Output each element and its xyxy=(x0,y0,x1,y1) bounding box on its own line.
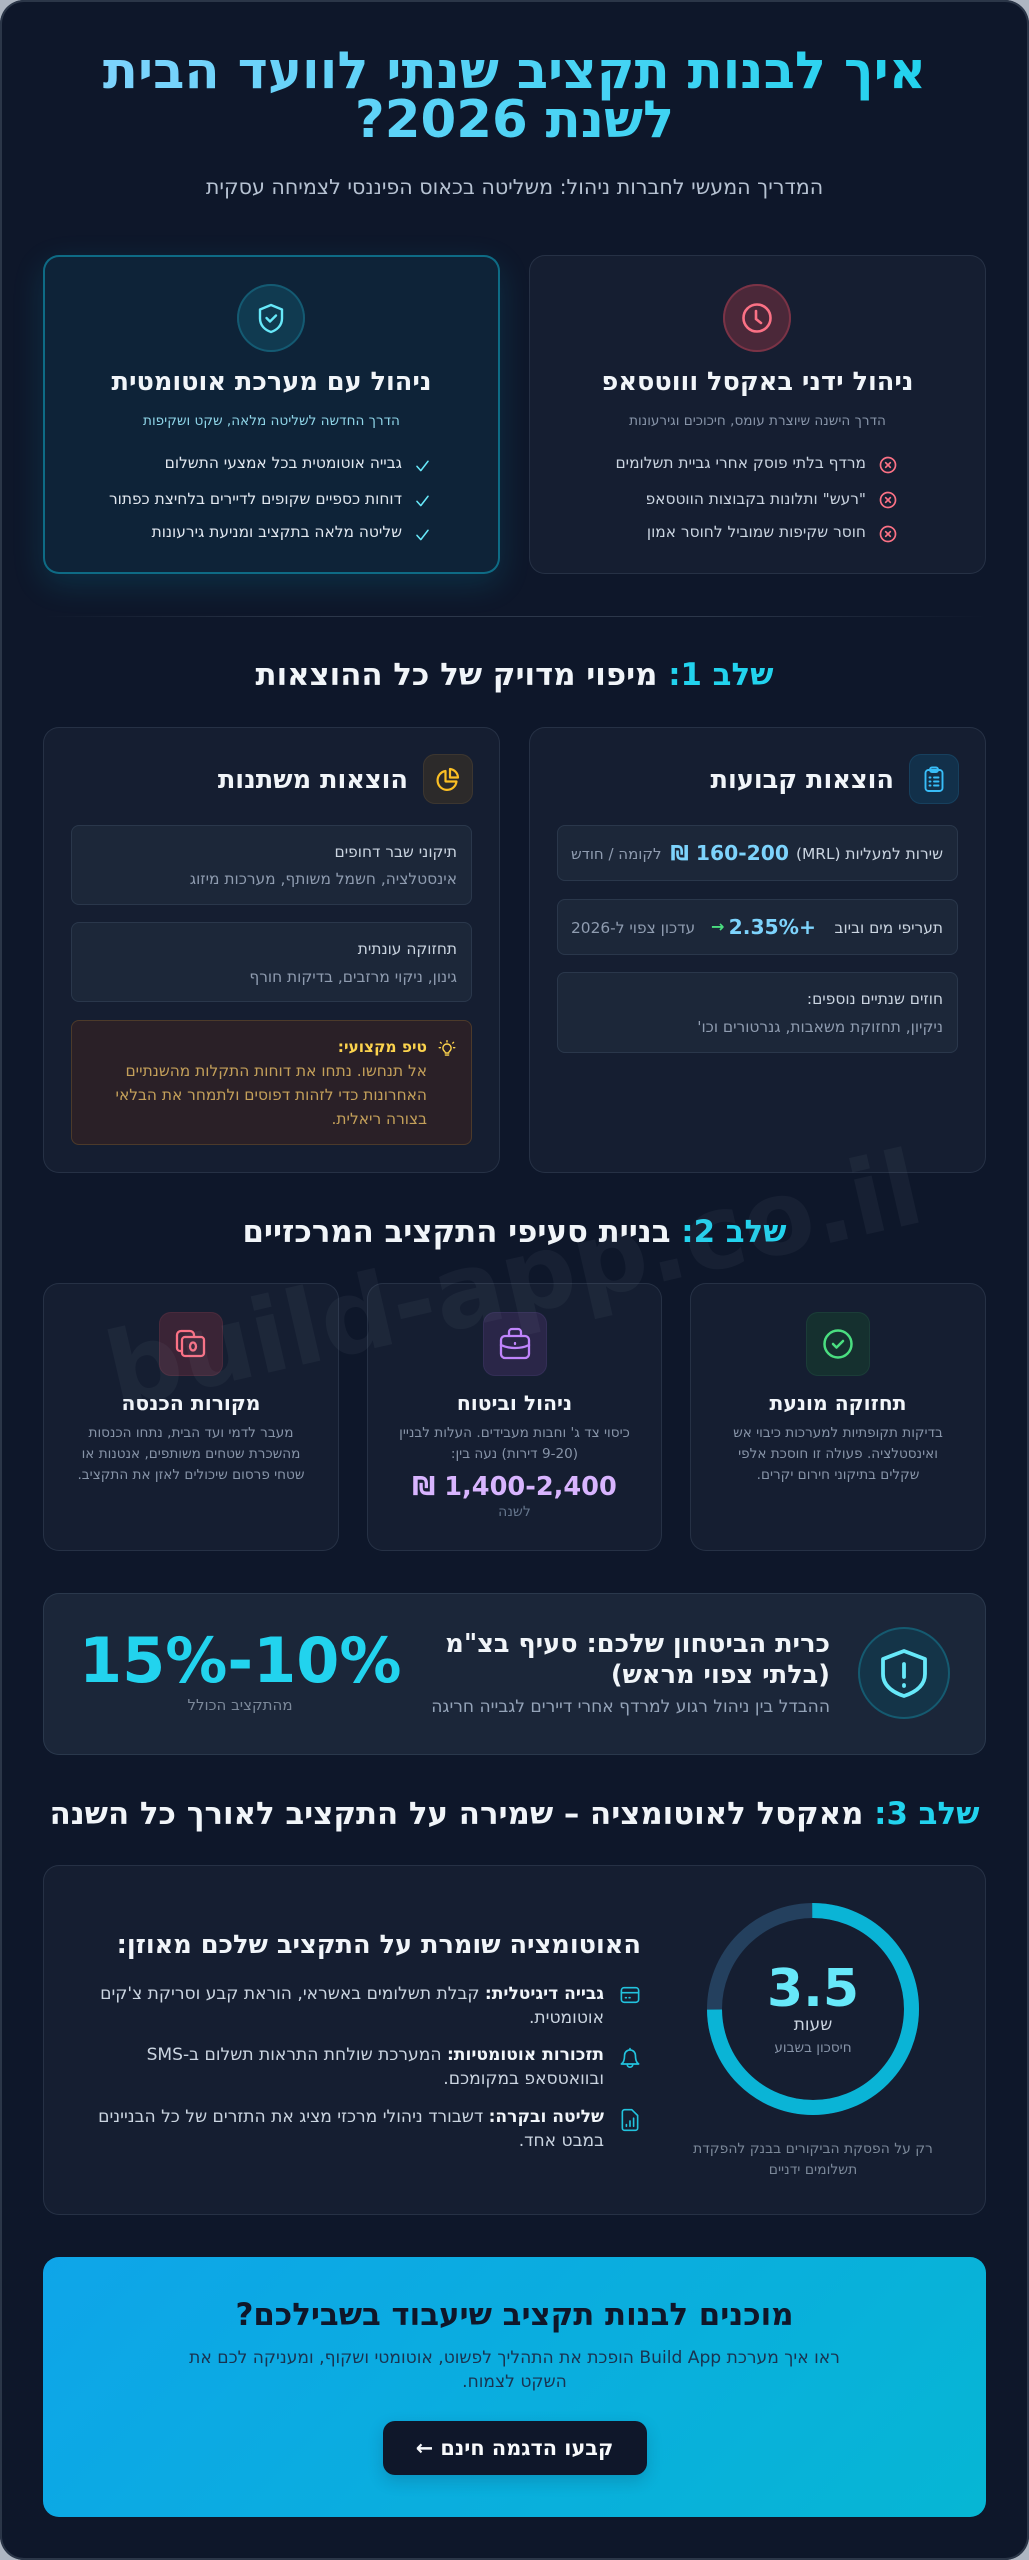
row: water and sewage: תעריפי מים וביוב xyxy=(835,919,943,937)
row: water and sewage xyxy=(557,899,958,955)
icon: clipboard xyxy=(909,754,959,804)
button xyxy=(382,2421,646,2475)
sub label: חיסכון בשבוע xyxy=(774,2040,852,2056)
panel: management and insurance xyxy=(367,1283,662,1551)
row: elevator service xyxy=(557,825,958,881)
row: seasonal maintenance: גינון, ניקוי מרזבים, בדיקות חורף xyxy=(249,968,457,986)
item: lack of transparency: חוסר שקיפות שמוביל לחוסר אמון xyxy=(647,523,866,541)
description: כיסוי צד ג' וחבות מעבידים. העלות לבניין xyxy=(399,1425,630,1441)
row: elevator service: שירות למעליות (MRL) xyxy=(796,845,943,863)
text: גבייה דיגיטלית: קבלת תשלומים באשראי, הוראת קבע וסריקת צ'קים xyxy=(100,1984,604,2004)
heading: step 3: שלב 3: מאקסל לאוטומציה – שמירה על התקציב לאורך כל השנה xyxy=(50,1796,979,1832)
text: במבט אחד. xyxy=(519,2131,604,2151)
text: בצורה ריאלית. xyxy=(332,1110,427,1128)
description: מהשכרת שטחים משותפים, אנטנות או xyxy=(82,1446,300,1462)
description xyxy=(77,1425,305,1483)
row: annual contracts: חוזים שנתיים נוספים: xyxy=(807,990,943,1008)
text: אל תנחשו. נתחו את דוחות התקלות מהשנתיים xyxy=(125,1062,427,1080)
icon: banknotes xyxy=(159,1312,223,1376)
icon: briefcase xyxy=(483,1312,547,1376)
description xyxy=(189,2348,840,2392)
text: האחרונות כדי לזהות דפוסים ולתמחר את הבלאי xyxy=(116,1086,427,1104)
description: (9-20 דירות) נעה בין: xyxy=(451,1446,578,1462)
title: ניהול וביטוח xyxy=(457,1391,572,1415)
heading: step 1: שלב 1: מיפוי מדויק של כל ההוצאות xyxy=(256,657,773,693)
row: emergency repairs: תיקוני שבר דחופים xyxy=(335,843,457,861)
row: elevator service: לקומה / חודש xyxy=(571,845,662,863)
row: seasonal maintenance: תחזוקה עונתית xyxy=(358,940,457,958)
unit: לשנה xyxy=(498,1504,531,1520)
value: 3.5 xyxy=(767,1959,859,2019)
chart caption: רק על הפסקת הביקורים בבנק להפקדת xyxy=(693,2141,933,2157)
description: בדיקות תקופתיות למערכות כיבוי אש xyxy=(733,1425,943,1441)
text: שליטה ובקרה: דשבורד ניהולי מרכזי מציג את התזרים של כל הבניינים xyxy=(98,2107,604,2127)
title: איך לבנות תקציב שנתי לוועד הבית xyxy=(103,41,926,101)
panel: fixed expenses xyxy=(529,727,986,1173)
icon: shield alert xyxy=(858,1627,950,1719)
heading: האוטומציה שומרת על התקציב שלכם מאוזן: xyxy=(117,1930,641,1960)
description: ההבדל בין ניהול רגוע למרדף אחרי דיירים לגבייה חריגה xyxy=(431,1697,830,1717)
title: לשנת 2026? xyxy=(355,90,674,150)
unit: שעות xyxy=(794,2015,832,2035)
description: ראו איך מערכת Build App הופכת את התהליך לפשוט, אוטומטי ושקוף, ומעניקה לכם את xyxy=(189,2348,840,2368)
panel: variable expenses xyxy=(43,727,500,1173)
value: 1,400-2,400 ₪ xyxy=(412,1472,617,1502)
panel: income sources xyxy=(43,1283,339,1551)
heading: מוכנים לבנות תקציב שיעבוד בשבילכם? xyxy=(235,2297,794,2333)
description: השקט לצמוח. xyxy=(462,2372,567,2392)
row: seasonal maintenance xyxy=(71,922,472,1002)
panel: manual management xyxy=(529,255,986,574)
heading: (בלתי צפוי מראש) xyxy=(611,1660,830,1690)
icon: pie chart xyxy=(423,754,473,804)
icon: shield check xyxy=(237,284,305,352)
panel: call to action xyxy=(43,2257,986,2517)
list: benefits xyxy=(109,454,429,541)
watermark: build-app.co.il xyxy=(95,1128,933,1432)
chart caption xyxy=(693,2141,933,2178)
callout: pro tip xyxy=(71,1020,472,1145)
description: מעבר לדמי ועד הבית, נתחו הכנסות xyxy=(89,1425,293,1441)
heading: כרית הביטחון שלכם: סעיף בצ"מ xyxy=(445,1629,830,1659)
text xyxy=(100,1984,604,2028)
title: תחזוקה מונעת xyxy=(770,1391,906,1415)
item: automatic reminders xyxy=(147,2045,640,2089)
item: full control: שליטה מלאה בתקציב ומניעת גירעונות xyxy=(152,523,402,541)
chart caption: תשלומים ידניים xyxy=(769,2162,857,2178)
stat label: מהתקציב הכולל xyxy=(187,1696,293,1714)
row: emergency repairs xyxy=(71,825,472,905)
row: annual contracts: ניקיון, תחזוקת משאבות, גנרטורים וכו' xyxy=(697,1018,943,1036)
description: שקלים בתיקוני חירום יקרים. xyxy=(757,1467,919,1483)
text: אוטומטית. xyxy=(529,2008,604,2028)
panel: automatic management xyxy=(43,255,500,574)
description: הדרך הישנה שיוצרת עומס, חיכוכים וגירעונות xyxy=(629,413,886,429)
heading: הוצאות קבועות xyxy=(711,765,894,795)
subtitle: המדריך המעשי לחברות ניהול: משליטה בכאוס הפיננסי לצמיחה עסקית xyxy=(206,175,823,199)
heading: ניהול עם מערכת אוטומטית xyxy=(111,367,432,397)
text: ובוואטסאפ במקומכם. xyxy=(443,2069,604,2089)
row: water and sewage: עדכון צפוי ל-2026 xyxy=(571,919,695,937)
stat: 15%-10% xyxy=(79,1624,402,1697)
button: קבעו הדגמה חינם ← xyxy=(416,2436,613,2460)
description xyxy=(733,1425,943,1483)
row: elevator service: 160-200 ₪ xyxy=(670,841,789,865)
heading: step 2: שלב 2: בניית סעיפי התקציב המרכזיים xyxy=(242,1214,787,1250)
icon: check circle xyxy=(806,1312,870,1376)
description: הדרך החדשה לשליטה מלאה, שקט ושקיפות xyxy=(143,413,400,429)
text: תזכורות אוטומטיות: המערכת שולחת התראות תשלום ב-SMS xyxy=(147,2045,604,2065)
text xyxy=(116,1038,427,1128)
icon: report xyxy=(622,2108,638,2132)
text xyxy=(98,2107,604,2151)
heading: ניהול ידני באקסל וווטסאפ xyxy=(602,367,914,397)
row: annual contracts xyxy=(557,972,958,1053)
title xyxy=(0,47,1029,145)
callout: safety cushion xyxy=(43,1593,986,1755)
row: water and sewage: +2.35% xyxy=(729,915,816,939)
description: שטחי פרסום שיכולים לאזן את התקציב. xyxy=(77,1467,305,1483)
icon: light bulb xyxy=(438,1040,456,1056)
icon: bell xyxy=(620,2048,640,2068)
text: טיפ מקצועי: xyxy=(338,1038,427,1056)
panel: preventive maintenance xyxy=(690,1283,986,1551)
description xyxy=(399,1425,630,1462)
list: problems xyxy=(615,454,896,542)
title: מקורות הכנסה xyxy=(122,1391,260,1415)
icon: clock xyxy=(723,284,791,352)
heading: הוצאות משתנות xyxy=(218,765,408,795)
row: water and sewage: → xyxy=(711,917,724,936)
panel: automation xyxy=(43,1865,986,2215)
item: auto collection: גבייה אוטומטית בכל אמצעי התשלום xyxy=(165,454,402,472)
description: ואינסטלציה. פעולה זו חוסכת אלפי xyxy=(738,1446,938,1462)
item: control and monitoring xyxy=(98,2107,638,2151)
donut chart xyxy=(707,1903,919,2115)
item: financial reports: דוחות כספיים שקופים לדיירים בלחיצת כפתור xyxy=(109,490,402,508)
heading xyxy=(445,1629,830,1690)
item: digital collection xyxy=(100,1984,640,2028)
item: chasing payments: מרדף בלתי פוסק אחרי גביית תשלומים xyxy=(615,454,866,472)
item: whatsapp noise: "רעש" ותלונות בקבוצות הווטסאפ xyxy=(646,490,866,508)
text xyxy=(147,2045,604,2089)
icon: credit card xyxy=(620,1986,640,2004)
row: emergency repairs: אינסטלציה, חשמל משותף, מערכות מיזוג xyxy=(190,870,457,888)
